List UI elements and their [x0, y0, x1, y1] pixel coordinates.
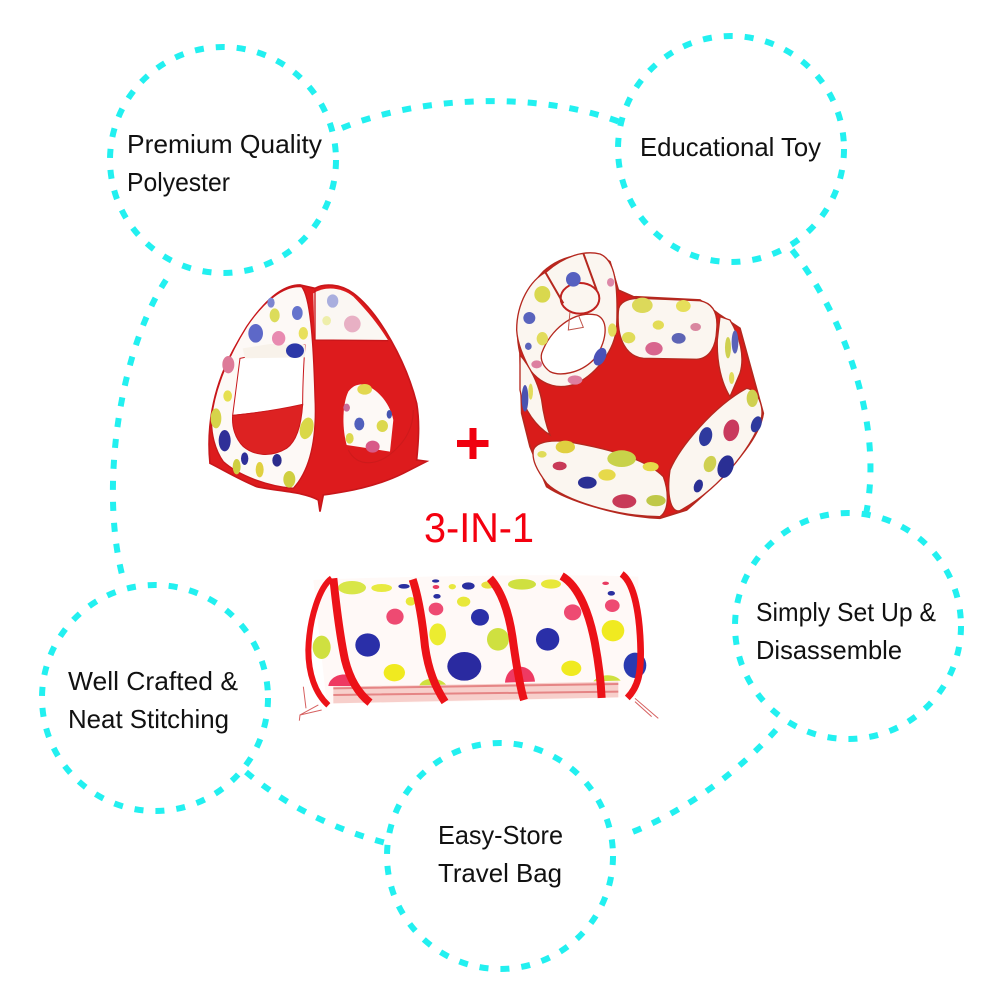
label: premium quality: Premium Quality: [127, 129, 322, 159]
product: pop-up tent: [209, 285, 427, 512]
label: simply set up: [756, 597, 936, 665]
label: easy-store: Easy-Store: [438, 820, 563, 850]
label: easy-store: Travel Bag: [438, 858, 562, 888]
connector: left: [113, 280, 166, 582]
label: easy-store: [438, 820, 563, 888]
connector: lower left: [246, 772, 386, 843]
circle: easy-store: [387, 743, 613, 969]
label: well crafted: Neat Stitching: [68, 704, 229, 734]
circle: educational toy: [618, 36, 844, 262]
heading: 3-in-1: 3-IN-1: [424, 504, 534, 551]
circle: premium quality: [110, 47, 336, 273]
label: well crafted: [68, 666, 238, 734]
label: educational toy: Educational Toy: [640, 132, 821, 162]
label: simply set up: Disassemble: [756, 635, 902, 665]
product: play tunnel: [299, 574, 658, 721]
label: simply set up: Simply Set Up &: [756, 597, 936, 627]
product: ball pit: [517, 253, 764, 518]
label: well crafted: Well Crafted &: [68, 666, 238, 696]
circle: simply set up: [735, 513, 961, 739]
connector: lower right: [622, 730, 776, 836]
plus sign: [457, 428, 488, 459]
connector: right: [792, 250, 870, 514]
label: premium quality: Polyester: [127, 167, 230, 197]
circle: well crafted: [42, 585, 268, 811]
label: premium quality: [127, 129, 322, 197]
connector: top: [342, 101, 625, 128]
